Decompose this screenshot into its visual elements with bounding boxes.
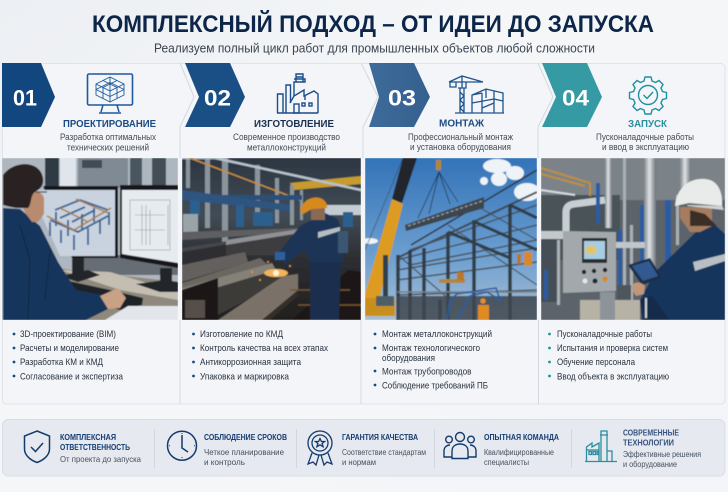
icon: monitor with 3D model [88,74,132,113]
icon: clock [168,431,196,460]
benefit: modern technology [623,428,701,469]
list: launch tasks: Ввод объекта в эксплуатацию [557,372,669,382]
photo: welder in workshop [182,158,361,320]
list: installation tasks: оборудования [382,353,435,363]
benefit: deadlines [204,433,287,467]
benefit: modern technology: СОВРЕМЕННЫЕ [623,428,680,438]
benefit: deadlines: СОБЛЮДЕНИЕ СРОКОВ [204,433,287,442]
benefit: experienced team: Квалифицированные [484,448,554,457]
step 02 badge [185,63,245,127]
text: design description: Разработка оптимальных [60,132,157,142]
benefit: quality guarantee: и нормам [342,458,376,467]
benefit: quality guarantee: Соответствие стандартам [342,448,426,457]
list: manufacturing tasks [192,329,328,382]
benefit: comprehensive responsibility: ОТВЕТСТВЕННОСТЬ [60,443,130,452]
panel: advantages strip [2,420,725,476]
text: design description [60,132,157,152]
benefit: modern technology: ТЕХНОЛОГИИ [623,438,674,448]
list: launch tasks: Испытания и проверка систем [557,343,668,353]
icon: quality rosette [308,431,332,465]
list: installation tasks: Монтаж трубопроводов [382,366,472,376]
icon: factory [277,74,318,113]
list: design tasks: Расчеты и моделирование [20,343,119,353]
icon: teal factory [585,431,617,462]
text: manufacturing description [233,132,340,152]
text: manufacturing description: металлоконструкций [247,142,326,152]
title: КОМПЛЕКСНЫЙ ПОДХОД – ОТ ИДЕИ ДО ЗАПУСКА [92,10,654,38]
heading: launch: ЗАПУСК [628,118,668,130]
step 03 badge: 03 [388,86,416,110]
step 03 badge [369,63,430,127]
text: manufacturing description: Современное производство [233,132,340,142]
step 02 badge: 02 [204,86,231,110]
benefit: quality guarantee: ГАРАНТИЯ КАЧЕСТВА [342,433,418,442]
list: installation tasks: Соблюдение требований ПБ [382,380,488,390]
list: launch tasks: Пусконаладочные работы [557,329,652,339]
benefit: comprehensive responsibility: КОМПЛЕКСНАЯ [60,433,116,442]
benefit: experienced team: специалисты [484,458,529,467]
heading: manufacturing: ИЗГОТОВЛЕНИЕ [254,118,334,130]
heading: installation: МОНТАЖ [439,118,484,130]
benefit: comprehensive responsibility: От проекта до запуска [60,454,141,464]
heading: design: ПРОЕКТИРОВАНИЕ [63,118,156,130]
icon: gear with check [630,77,666,114]
list: design tasks [13,329,124,382]
photo: crane and steel frame [362,158,540,320]
benefit: comprehensive responsibility [60,433,141,464]
icon: crane and frame [449,76,504,113]
step 04 badge [542,63,602,127]
list: installation tasks: Монтаж металлоконструкций [382,329,492,339]
photo: operator at control panel [541,158,725,320]
subtitle: Реализуем полный цикл работ для промышленных объектов любой сложности [154,42,595,56]
text: installation description [408,132,513,152]
text: installation description: Профессиональный монтаж [408,132,513,142]
list: installation tasks: Монтаж технологического [382,343,480,353]
benefit: modern technology: Эффективные решения [623,450,701,459]
icon: shield [24,431,50,462]
step 01 badge: 01 [13,86,37,110]
benefit: experienced team [484,433,559,467]
text: launch description: Пусконаладочные работы [596,132,694,142]
panel: process cards [2,63,725,404]
step 04 badge: 04 [562,86,590,110]
icon: team [444,432,476,458]
list: launch tasks [548,329,669,382]
text: installation description: и установка оборудования [410,142,511,152]
list: manufacturing tasks: Антикоррозионная защита [200,357,302,367]
text: launch description [596,132,694,152]
benefit: experienced team: ОПЫТНАЯ КОМАНДА [484,433,559,442]
benefit: deadlines: Четкое планирование [204,447,284,457]
list: manufacturing tasks: Контроль качества на всех этапах [200,343,328,353]
benefit: quality guarantee [342,433,426,467]
benefit: modern technology: и оборудование [623,460,677,469]
list: manufacturing tasks: Изготовление по КМД [200,329,283,339]
text: design description: технических решений [67,142,149,152]
photo: engineer at monitors [2,158,178,320]
list: launch tasks: Обучение персонала [557,357,636,367]
benefit: deadlines: и контроль [204,457,245,467]
step 01 badge [2,63,55,127]
list: design tasks: Разработка КМ и КМД [20,357,103,367]
text: launch description: и ввод в эксплуатацию [602,142,689,152]
list: design tasks: 3D-проектирование (BIM) [20,329,116,339]
list: manufacturing tasks: Упаковка и маркировка [200,372,290,382]
list: design tasks: Согласование и экспертиза [20,372,124,382]
list: installation tasks [374,329,492,390]
